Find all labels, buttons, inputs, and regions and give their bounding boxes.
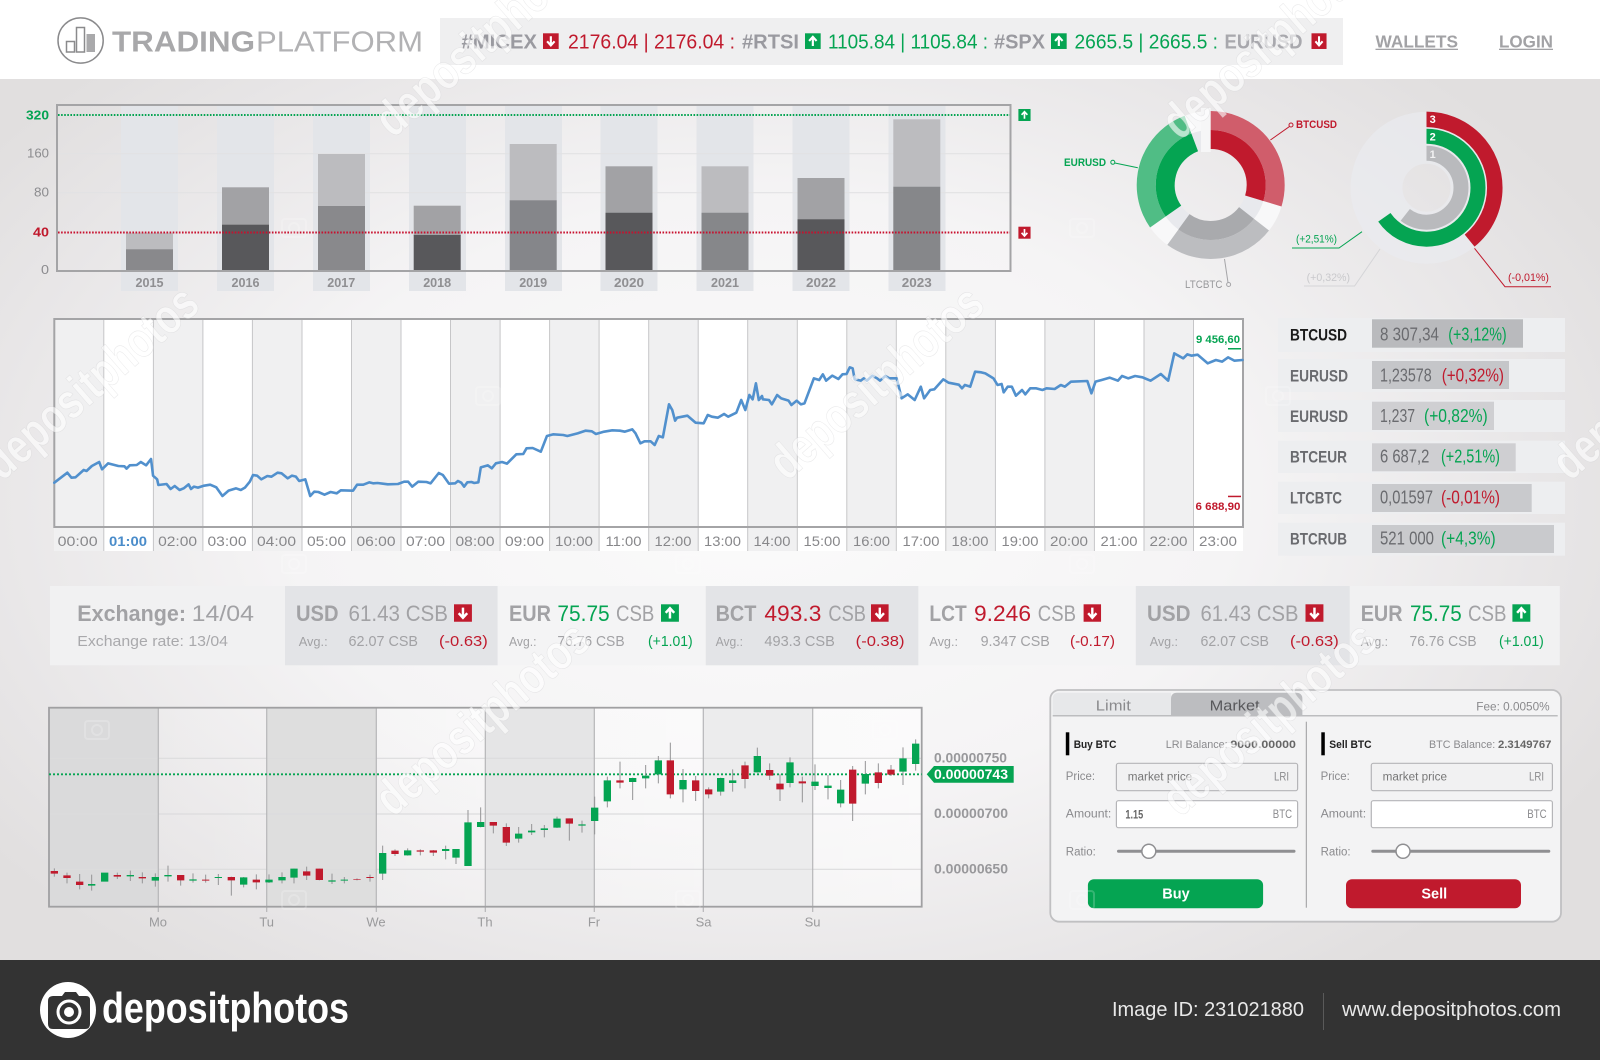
hour labels: 03:00 — [208, 533, 247, 549]
header bar — [0, 0, 1600, 79]
card: USD: USD — [296, 601, 338, 626]
sell form: Ratio: — [1321, 846, 1351, 858]
row: EURUSD: (+0,32%) — [1442, 366, 1504, 386]
ring 3: 3 — [1430, 114, 1436, 126]
nav links: LOGIN — [1499, 31, 1553, 51]
high marker: 9 456,60 — [1196, 334, 1240, 346]
weekday labels: Mo — [149, 914, 167, 929]
nav links — [1376, 31, 1553, 51]
segment: EURUSD — [1121, 95, 1301, 275]
year labels: 2020 — [614, 275, 644, 290]
card: LCT: Avg.: — [929, 634, 958, 649]
card: EUR second: 76.76 CSB — [1410, 633, 1477, 650]
card: USD second — [1136, 586, 1350, 665]
hour labels: 11:00 — [606, 533, 642, 549]
sell form: LRI — [1529, 772, 1544, 784]
buy form: Buy BTC — [1074, 739, 1116, 751]
row: EURUSD: 1,23578 — [1380, 366, 1432, 386]
row: EURUSD: EURUSD — [1290, 366, 1348, 386]
sell form: Amount: — [1321, 808, 1366, 820]
logo wordmark: TRADING — [112, 27, 255, 59]
card: EUR second: (+1.01) — [1499, 633, 1544, 650]
ring 1 — [1392, 149, 1461, 222]
card: exchange date — [50, 586, 285, 665]
card: BCT: Avg.: — [716, 634, 743, 649]
callout: EURUSD: EURUSD — [1064, 157, 1106, 169]
card: EUR: 76.76 CSB — [557, 633, 625, 650]
ticker strip: #RTSI — [742, 30, 799, 53]
card: LCT: 9.347 CSB — [981, 633, 1050, 650]
ticker strip: EURUSD — [1224, 30, 1302, 53]
row: EURUSD second: (+0,82%) — [1424, 406, 1488, 426]
hour labels: 16:00 — [853, 533, 890, 549]
buy form — [1066, 732, 1298, 908]
ring 2: 2 — [1430, 132, 1436, 144]
logo wordmark — [112, 27, 423, 59]
image id: Image ID: 231021880 — [1112, 999, 1304, 1021]
card: EUR: CSB — [616, 601, 654, 626]
row: BTCRUB: 521 000 — [1380, 528, 1434, 548]
card: USD: (-0.63) — [439, 633, 488, 650]
threshold arrows — [1018, 109, 1031, 121]
card: USD — [285, 586, 498, 665]
row: BTCEUR: 6 687,2 — [1380, 446, 1429, 466]
sell form: BTC Balance: — [1429, 739, 1495, 751]
hour labels: 23:00 — [1199, 533, 1237, 549]
row: BTCUSD: 8 307,34 — [1380, 325, 1439, 345]
year labels: 2015 — [136, 275, 164, 290]
weekday labels: Fr — [588, 914, 601, 929]
segment: BTCUSD — [1146, 120, 1275, 250]
card: exchange date: Exchange rate: 13/04 — [77, 633, 228, 650]
sell button — [1346, 879, 1521, 908]
price axis labels: 0.00000700 — [934, 806, 1008, 821]
background columns — [121, 105, 946, 291]
year labels: 2016 — [232, 275, 260, 290]
weekday labels: Sa — [696, 914, 712, 929]
currency pair table — [1278, 318, 1565, 556]
hour labels: 01:00 — [109, 533, 147, 549]
callout: +0,32%: (+0,32%) — [1307, 272, 1350, 284]
row: LTCBTC: 0,01597 — [1380, 488, 1433, 508]
year labels: 2018 — [423, 275, 451, 290]
sell form: 2.3149767 — [1498, 739, 1551, 751]
sell button: Sell — [1421, 886, 1447, 902]
y axis labels: 40 — [33, 224, 49, 240]
ticker strip: 2176.04 | 2176.04 : — [568, 30, 735, 53]
year labels — [136, 275, 932, 290]
row: LTCBTC — [1278, 482, 1565, 514]
row: BTCRUB: BTCRUB — [1290, 530, 1347, 548]
bars — [126, 119, 940, 271]
buy button: Buy — [1162, 886, 1190, 902]
candlestick chart — [49, 708, 1014, 929]
row: EURUSD second: EURUSD — [1290, 407, 1348, 426]
card: LCT: LCT — [929, 601, 967, 626]
sell form: market price — [1383, 772, 1447, 784]
hour labels: 00:00 — [58, 533, 98, 549]
fee label: Fee: 0.0050% — [1476, 700, 1550, 714]
row: LTCBTC: LTCBTC — [1290, 488, 1342, 508]
callout: -0,01%: (-0,01%) — [1508, 272, 1549, 284]
row: BTCRUB — [1278, 523, 1565, 556]
callout: BTCUSD — [1270, 119, 1337, 140]
tab: Market — [1171, 693, 1302, 716]
callout: -0,01% — [1474, 248, 1551, 287]
card: LCT — [918, 586, 1136, 665]
callout: BTCUSD: BTCUSD — [1296, 119, 1337, 131]
tab: Limit — [1053, 693, 1171, 716]
sell form: Price: — [1321, 771, 1350, 783]
row: BTCUSD: BTCUSD — [1290, 326, 1347, 345]
ring 3 — [1358, 114, 1495, 256]
card: exchange date: Exchange: — [77, 601, 186, 626]
low marker — [1196, 496, 1241, 513]
footer wordmark: depositphotos — [102, 985, 349, 1033]
hour labels: 20:00 — [1050, 533, 1088, 549]
price line — [54, 353, 1242, 496]
row: BTCEUR: BTCEUR — [1290, 448, 1347, 466]
card: EUR: Avg.: — [509, 634, 536, 649]
callout: EURUSD — [1064, 157, 1138, 169]
ticker strip — [440, 18, 1343, 65]
segment: LTCBTC — [1120, 94, 1301, 276]
card: USD second: 61.43 CSB — [1200, 601, 1298, 626]
order form panel — [1050, 690, 1561, 922]
price axis labels: 0.00000750 — [934, 750, 1007, 766]
footer logo icon — [40, 982, 96, 1038]
hour labels — [58, 533, 1237, 549]
current price tag: 0.00000743 — [934, 767, 1009, 782]
card: EUR — [498, 586, 706, 665]
ticker strip: #MICEX — [462, 30, 537, 53]
ticker strip: 2665.5 | 2665.5 : — [1074, 30, 1218, 53]
y axis labels — [26, 108, 49, 277]
logo icon — [58, 18, 103, 63]
candles: Thursday to Sunday — [544, 739, 916, 841]
row: BTCUSD: (+3,12%) — [1448, 325, 1507, 345]
buy form: Ratio: — [1066, 846, 1096, 858]
card: USD second: 62.07 CSB — [1200, 633, 1269, 650]
card: USD second: (-0.63) — [1290, 633, 1339, 650]
card: EUR second — [1350, 586, 1560, 665]
row: EURUSD second: 1,237 — [1380, 406, 1415, 426]
card: BCT: BCT — [716, 601, 757, 626]
hour labels: 05:00 — [307, 533, 346, 549]
price axis labels — [934, 750, 1008, 876]
donut chart: currency pairs — [1064, 94, 1337, 291]
sell form: Sell BTC — [1329, 739, 1372, 751]
hour labels: 17:00 — [902, 533, 940, 549]
hour labels: 22:00 — [1150, 533, 1188, 549]
callout: +2,51% — [1292, 232, 1362, 248]
low marker: 6 688,90 — [1196, 501, 1240, 513]
buy button — [1088, 879, 1263, 908]
tab: Market: Market — [1210, 698, 1261, 714]
ticker strip: 1105.84 | 1105.84 : — [828, 30, 988, 53]
card: LCT: (-0.17) — [1070, 633, 1115, 650]
hour labels: 10:00 — [555, 533, 593, 549]
ring 2 — [1375, 132, 1478, 239]
buy form: market price — [1128, 772, 1192, 784]
card: EUR: (+1.01) — [648, 633, 693, 650]
radial progress chart — [1292, 114, 1551, 287]
card: EUR: 75.75 — [557, 601, 610, 626]
card: BCT: 493.3 — [764, 601, 821, 626]
card: EUR second: CSB — [1468, 601, 1506, 626]
weekday labels — [149, 914, 821, 929]
year labels: 2022 — [806, 275, 836, 290]
card: LCT: 9.246 — [974, 601, 1031, 626]
ring 1: 1 — [1430, 149, 1436, 161]
sell form: BTC — [1527, 809, 1547, 821]
card: EUR second: EUR — [1361, 601, 1403, 626]
card: BCT: CSB — [828, 601, 866, 626]
row: BTCUSD — [1278, 318, 1565, 352]
y axis labels: 320 — [26, 108, 49, 123]
hour labels: 18:00 — [952, 533, 989, 549]
card: USD: 62.07 CSB — [348, 633, 418, 650]
card: EUR second: 75.75 — [1410, 601, 1462, 626]
hour labels: 14:00 — [754, 533, 791, 549]
card: BCT — [706, 586, 918, 665]
buy form: 9000.00000 — [1230, 739, 1296, 751]
hour labels: 09:00 — [505, 533, 544, 549]
year labels: 2023 — [902, 275, 932, 290]
card: USD: Avg.: — [299, 634, 328, 649]
card: EUR second: Avg.: — [1361, 634, 1388, 649]
tab: Limit: Limit — [1096, 698, 1132, 714]
line chart: hourly price — [54, 319, 1243, 551]
hour labels: 13:00 — [704, 533, 741, 549]
buy form: Amount: — [1066, 808, 1111, 820]
hour labels: 07:00 — [406, 533, 445, 549]
weekday labels: Th — [477, 914, 493, 929]
exchange rate strip — [50, 586, 1560, 665]
buy form: BTC — [1273, 809, 1292, 821]
callout: LTCBTC: LTCBTC — [1185, 279, 1223, 291]
buy form: LRI Balance: — [1166, 739, 1228, 751]
watermarks: depositphotos — [1150, 610, 1387, 826]
weekday labels: We — [366, 914, 386, 929]
hour labels: 15:00 — [804, 533, 841, 549]
row: BTCEUR: (+2,51%) — [1441, 446, 1500, 466]
buy form: 1.15 — [1125, 810, 1144, 822]
weekday labels: Su — [805, 914, 821, 929]
buy form: LRI — [1274, 772, 1289, 784]
website: www.depositphotos.com — [1341, 999, 1561, 1021]
nav links: WALLETS — [1376, 31, 1458, 51]
price axis labels: 0.00000650 — [934, 862, 1008, 876]
y axis labels: 0 — [41, 262, 49, 277]
watermarks: depositphotos — [757, 274, 994, 490]
card: BCT: 493.3 CSB — [764, 633, 835, 650]
card: LCT: CSB — [1038, 601, 1076, 626]
card: EUR: EUR — [509, 601, 551, 626]
card: USD second: Avg.: — [1150, 634, 1178, 649]
row: BTCRUB: (+4,3%) — [1441, 528, 1496, 548]
year labels: 2019 — [519, 275, 547, 290]
hour labels: 21:00 — [1100, 533, 1138, 549]
card: USD second: USD — [1147, 601, 1190, 626]
footer bar — [0, 960, 1600, 1060]
logo wordmark: PLATFORM — [256, 27, 423, 59]
callout: +2,51%: (+2,51%) — [1296, 234, 1337, 246]
y axis labels: 160 — [27, 146, 49, 161]
card: BCT: (-0.38) — [856, 633, 904, 650]
callout: +0,32% — [1304, 249, 1380, 286]
hour labels: 19:00 — [1002, 533, 1039, 549]
year labels: 2017 — [327, 275, 355, 290]
y axis labels: 80 — [34, 185, 49, 200]
sell form — [1321, 732, 1552, 908]
watermarks: depositphotos — [363, 610, 600, 826]
ticker strip: #SPX — [994, 30, 1045, 53]
callout: LTCBTC — [1185, 259, 1231, 291]
year labels: 2021 — [711, 275, 739, 290]
hour labels: 08:00 — [456, 533, 495, 549]
card: USD: 61.43 CSB — [348, 601, 448, 626]
weekday labels: Tu — [259, 914, 274, 929]
buy form: Price: — [1066, 771, 1095, 783]
hour labels: 06:00 — [356, 533, 396, 549]
candles: Monday to Thursday — [54, 807, 532, 896]
row: BTCEUR — [1278, 441, 1565, 473]
hour labels: 04:00 — [257, 533, 296, 549]
row: EURUSD — [1278, 359, 1565, 392]
row: EURUSD second — [1278, 400, 1565, 432]
card: exchange date: 14/04 — [192, 601, 254, 626]
stacked bar chart — [26, 105, 1031, 291]
hour labels: 12:00 — [654, 533, 692, 549]
row: LTCBTC: (-0,01%) — [1441, 488, 1500, 508]
hour labels: 02:00 — [158, 533, 197, 549]
